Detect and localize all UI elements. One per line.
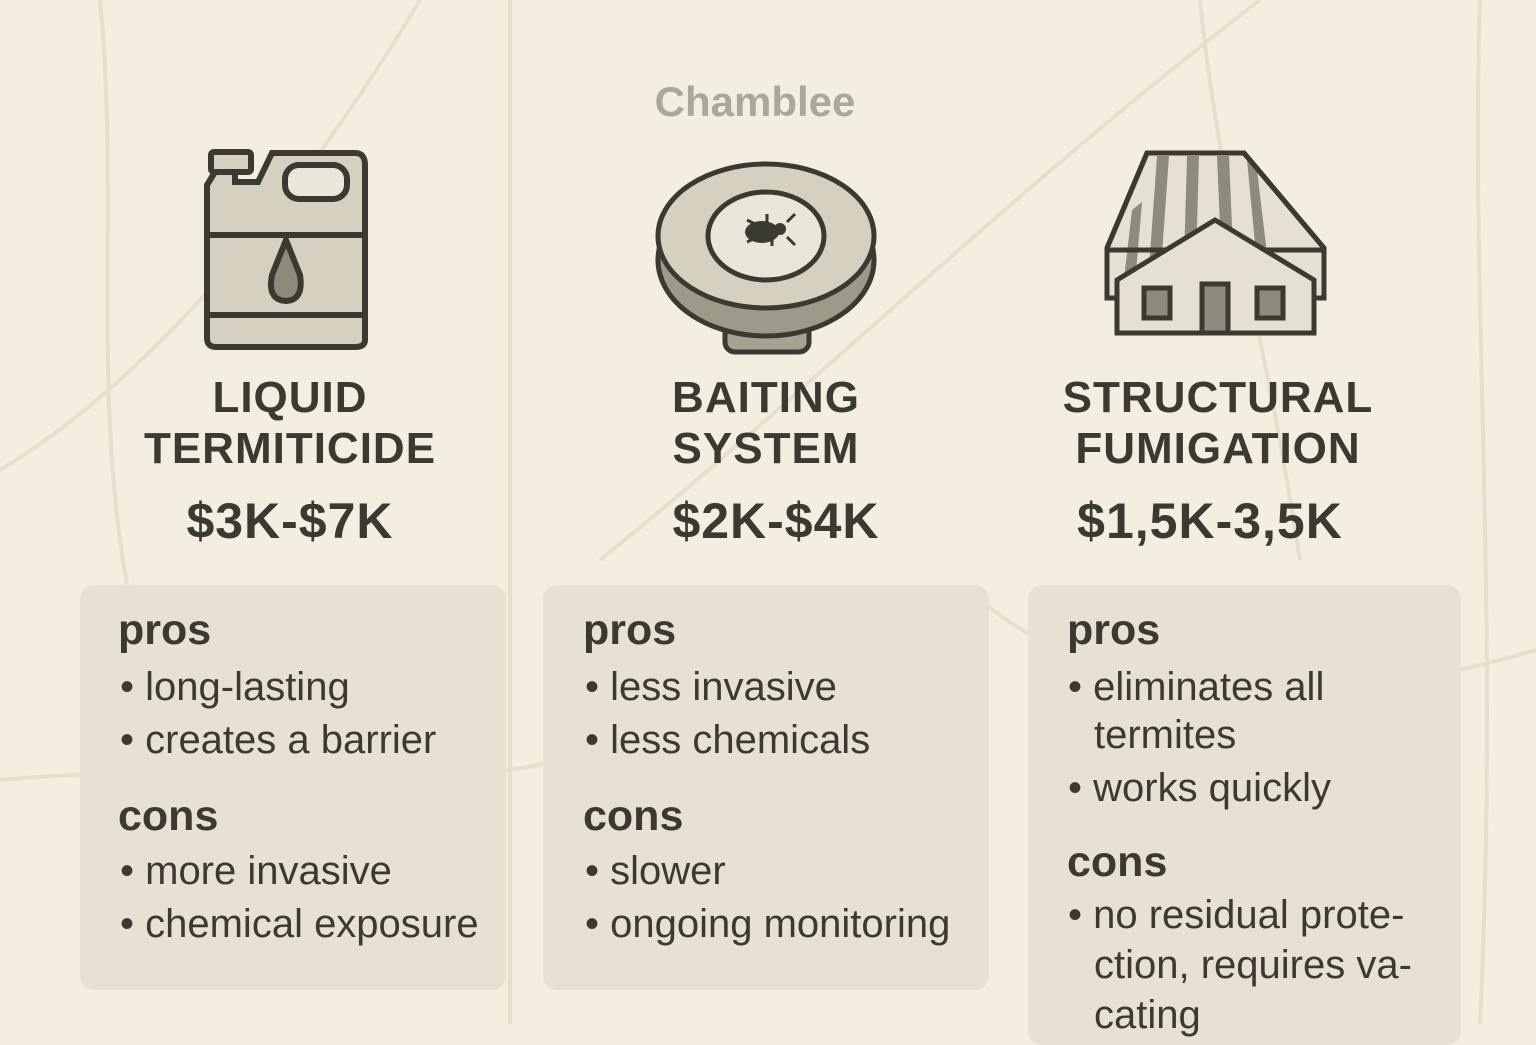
panel: baiting pros/cons: pros <box>583 606 676 654</box>
title: Chamblee <box>655 78 855 125</box>
panel: fumigation pros/cons: ction, requires va- <box>1094 943 1412 987</box>
panel: baiting pros/cons <box>543 585 989 990</box>
panel: fumigation pros/cons: cating <box>1094 993 1201 1037</box>
panel: fumigation pros/cons: pros <box>1067 606 1160 654</box>
panel: fumigation pros/cons <box>1028 585 1461 1045</box>
price: baiting: $2K-$4K <box>672 493 880 549</box>
panel: fumigation pros/cons: • no residual prote- <box>1068 893 1404 937</box>
panel: fumigation pros/cons: • eliminates all <box>1068 665 1324 709</box>
panel: liquid pros/cons: • creates a barrier <box>120 718 436 762</box>
panel: baiting pros/cons: cons <box>583 792 683 840</box>
panel: liquid pros/cons: cons <box>118 792 218 840</box>
panel: fumigation pros/cons: termites <box>1094 713 1236 757</box>
icon: jerrycan <box>204 149 368 350</box>
price: fumigation: $1,5K-3,5K <box>1077 493 1343 549</box>
panel: liquid pros/cons: • more invasive <box>120 849 392 893</box>
heading: structural fumigation: FUMIGATION <box>1075 424 1361 473</box>
panel: liquid pros/cons: • long-lasting <box>120 665 350 709</box>
heading: baiting system: BAITING <box>672 373 860 422</box>
panel: baiting pros/cons: • slower <box>585 849 726 893</box>
icon: fumigation tent house <box>1104 150 1326 336</box>
panel: fumigation pros/cons: cons <box>1067 838 1167 886</box>
panel: baiting pros/cons: • less invasive <box>585 665 837 709</box>
heading: liquid termiticide <box>144 373 436 473</box>
panel: liquid pros/cons: • chemical exposure <box>120 902 479 946</box>
heading: structural fumigation <box>1063 373 1373 473</box>
icon: bait station <box>656 162 876 354</box>
heading: structural fumigation: STRUCTURAL <box>1063 373 1373 422</box>
panel: baiting pros/cons: • less chemicals <box>585 718 870 762</box>
panel: liquid pros/cons <box>80 585 506 990</box>
heading: liquid termiticide: LIQUID <box>212 373 368 422</box>
heading: liquid termiticide: TERMITICIDE <box>144 424 436 473</box>
price: liquid: $3K-$7K <box>186 493 394 549</box>
panel: liquid pros/cons: pros <box>118 606 211 654</box>
heading: baiting system <box>672 373 860 473</box>
panel: baiting pros/cons: • ongoing monitoring <box>585 902 950 946</box>
panel: fumigation pros/cons: • works quickly <box>1068 766 1331 810</box>
heading: baiting system: SYSTEM <box>673 424 859 473</box>
